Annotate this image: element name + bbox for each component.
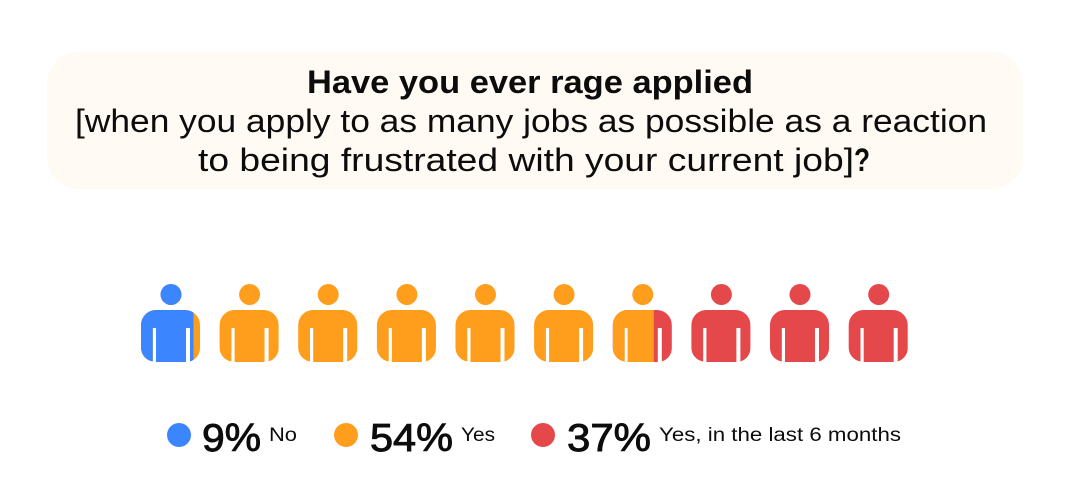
person 6: orange: [534, 284, 593, 362]
pictogram: ten people: [141, 284, 908, 362]
heading: Have you ever rage applied: [307, 64, 753, 100]
panel: question: [47, 52, 1023, 189]
person 3: orange: [298, 284, 357, 362]
legend: [167, 417, 901, 460]
person 8: red: [691, 284, 750, 362]
question definition line 2: to being frustrated with your current job]: [198, 142, 854, 178]
legend item: yes: Yes: [461, 425, 495, 446]
person 2: orange: [220, 284, 279, 362]
question definition line 1: [when you apply to as many jobs as possible as a reaction: [75, 103, 987, 139]
legend item: yes, in the last 6 months: Yes, in the last 6 months: [659, 425, 901, 446]
legend item: no: No: [269, 425, 297, 446]
legend item: yes: 54%: [370, 417, 453, 460]
person 10: red: [849, 284, 908, 362]
person 9: red: [770, 284, 829, 362]
person 4: orange: [377, 284, 436, 362]
person 1: blue and orange: [141, 284, 200, 362]
legend item: yes: [334, 417, 495, 460]
legend item: no: 9%: [202, 417, 261, 460]
person 7: orange and red: [613, 284, 672, 362]
legend item: yes, in the last 6 months: [531, 417, 901, 460]
question mark: ?: [854, 142, 870, 178]
person 5: orange: [456, 284, 515, 362]
legend item: no: [167, 417, 297, 460]
legend item: yes, in the last 6 months: 37%: [567, 417, 651, 460]
